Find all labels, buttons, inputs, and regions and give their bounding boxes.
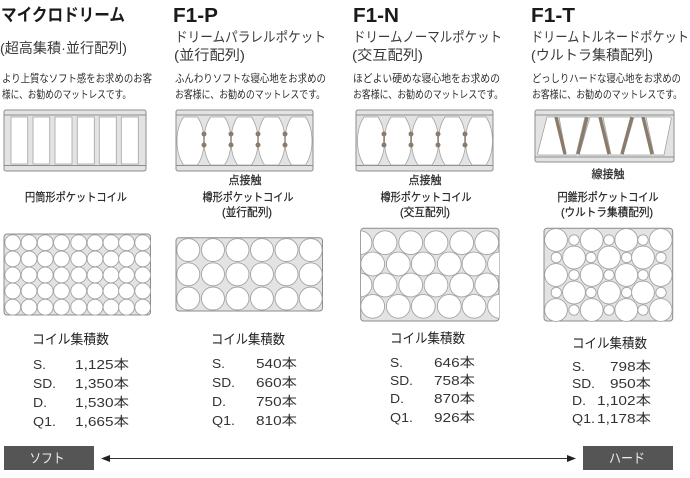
- coil counts: F1-T: 1,102本: [597, 393, 651, 408]
- coil counts: F1-P: 660本: [256, 375, 297, 390]
- coil counts: F1-N: 646本: [434, 355, 475, 370]
- coil counts: F1-P: 750本: [256, 394, 297, 409]
- coil counts: F1-P: コイル集積数: [211, 332, 285, 347]
- column heading: F1-N: ドリームノーマルポケット: [353, 29, 502, 45]
- description: マイクロドリーム: より上質なソフト感をお求めのお客: [2, 72, 152, 85]
- coil counts: F1-N: 758本: [434, 373, 475, 388]
- coil type label: conical: (ウルトラ集積配列): [561, 205, 653, 219]
- label: contact type, F1-T: 線接触: [592, 167, 624, 181]
- column heading: マイクロドリーム: (超高集積·並行配列): [0, 40, 127, 56]
- coil counts: F1-T: SD.: [572, 376, 595, 391]
- coil counts: F1-P: 540本: [256, 356, 297, 371]
- coil type label: barrel parallel: [202, 190, 294, 219]
- coil counts: F1-P: Q1.: [212, 413, 235, 428]
- column heading: マイクロドリーム: マイクロドリーム: [1, 5, 125, 25]
- label: contact type, F1-P: 点接触: [228, 173, 262, 187]
- coil layout: ultra density with small coils: [544, 228, 673, 321]
- description: マイクロドリーム: [2, 72, 152, 101]
- column heading: F1-N: [352, 5, 502, 63]
- column heading: F1-N: (交互配列): [352, 47, 423, 63]
- coil counts: F1-N: SD.: [390, 373, 413, 388]
- coil counts: F1-T: 950本: [610, 376, 651, 391]
- scale label: hard: ハード: [609, 451, 645, 466]
- coil counts: F1-P: SD.: [212, 375, 235, 390]
- label: contact type, F1-N: 点接触: [408, 173, 442, 187]
- column heading: F1-N: F1-N: [353, 5, 399, 27]
- coil type label: barrel parallel: 樽形ポケットコイル: [202, 190, 294, 204]
- cross-section: cylindrical coils: [4, 110, 146, 171]
- coil counts: F1-N: [390, 331, 475, 425]
- coil counts: マイクロドリーム: 1,125本: [75, 357, 129, 372]
- coil counts: マイクロドリーム: [32, 332, 129, 429]
- scale label: soft: [4, 446, 94, 470]
- coil type label: conical: [558, 190, 658, 219]
- arrow: soft to hard scale: [101, 455, 576, 462]
- description: マイクロドリーム: 様に、お勧めのマットレスです。: [2, 88, 131, 101]
- coil counts: F1-N: 926本: [434, 410, 475, 425]
- coil counts: F1-N: Q1.: [390, 410, 413, 425]
- description: F1-P: [175, 72, 326, 101]
- coil layout: 6 by 3 parallel: [176, 238, 322, 311]
- description: F1-N: お客様に、お勧めのマットレスです。: [353, 88, 503, 101]
- coil counts: F1-N: S.: [390, 355, 403, 370]
- coil counts: マイクロドリーム: Q1.: [33, 414, 56, 429]
- coil type label: cylindrical: 円筒形ポケットコイル: [25, 190, 127, 204]
- coil counts: F1-T: 798本: [610, 359, 651, 374]
- coil counts: F1-T: [572, 336, 651, 426]
- coil layout: 9 by 5 cylindrical: [4, 234, 151, 315]
- cross-section: barrel coils alternating: [356, 110, 493, 171]
- column heading: F1-T: [531, 5, 689, 63]
- scale label: soft: ソフト: [30, 451, 64, 466]
- cross-section: conical coils: [535, 110, 674, 162]
- coil counts: F1-N: D.: [390, 391, 404, 406]
- coil type label: barrel alternating: [380, 190, 472, 219]
- coil counts: マイクロドリーム: 1,350本: [75, 376, 129, 391]
- coil type label: barrel alternating: 樽形ポケットコイル: [380, 190, 472, 204]
- coil counts: F1-T: Q1.: [572, 411, 595, 426]
- description: F1-P: お客様に、お勧めのマットレスです。: [175, 88, 325, 101]
- coil counts: F1-T: 1,178本: [597, 411, 651, 426]
- coil counts: F1-P: S.: [212, 356, 225, 371]
- coil type label: conical: 円錐形ポケットコイル: [558, 190, 658, 204]
- column heading: F1-P: [173, 5, 326, 63]
- column heading: F1-P: ドリームパラレルポケット: [175, 29, 326, 45]
- coil layout: alternating: [360, 228, 500, 322]
- description: F1-P: ふんわりソフトな寝心地をお求めの: [175, 72, 326, 85]
- coil counts: F1-P: 810本: [256, 413, 297, 428]
- cross-section: barrel coils parallel: [176, 110, 313, 171]
- coil counts: マイクロドリーム: 1,530本: [75, 395, 129, 410]
- coil counts: マイクロドリーム: D.: [33, 395, 47, 410]
- column heading: F1-P: (並行配列): [174, 47, 245, 63]
- coil counts: F1-N: コイル集積数: [390, 331, 465, 346]
- column heading: F1-T: (ウルトラ集積配列): [531, 47, 653, 63]
- coil counts: F1-N: 870本: [434, 391, 475, 406]
- description: F1-T: [532, 72, 682, 101]
- coil counts: マイクロドリーム: S.: [33, 357, 46, 372]
- coil counts: マイクロドリーム: コイル集積数: [32, 332, 109, 347]
- column heading: F1-T: F1-T: [531, 5, 575, 27]
- coil counts: F1-T: S.: [572, 359, 585, 374]
- coil counts: F1-T: コイル集積数: [572, 336, 647, 351]
- coil counts: マイクロドリーム: SD.: [33, 376, 56, 391]
- coil type label: barrel alternating: (交互配列): [400, 206, 450, 219]
- description: F1-N: [353, 72, 503, 101]
- description: F1-N: ほどよい硬めな寝心地をお求めの: [353, 72, 500, 85]
- column heading: F1-P: F1-P: [173, 5, 218, 27]
- coil counts: F1-P: D.: [212, 394, 226, 409]
- coil type label: barrel parallel: (並行配列): [222, 205, 272, 219]
- scale label: hard: [583, 446, 673, 470]
- column heading: マイクロドリーム: [0, 5, 127, 56]
- coil counts: F1-P: [211, 332, 297, 428]
- coil counts: F1-T: D.: [572, 393, 586, 408]
- coil counts: マイクロドリーム: 1,665本: [75, 414, 129, 429]
